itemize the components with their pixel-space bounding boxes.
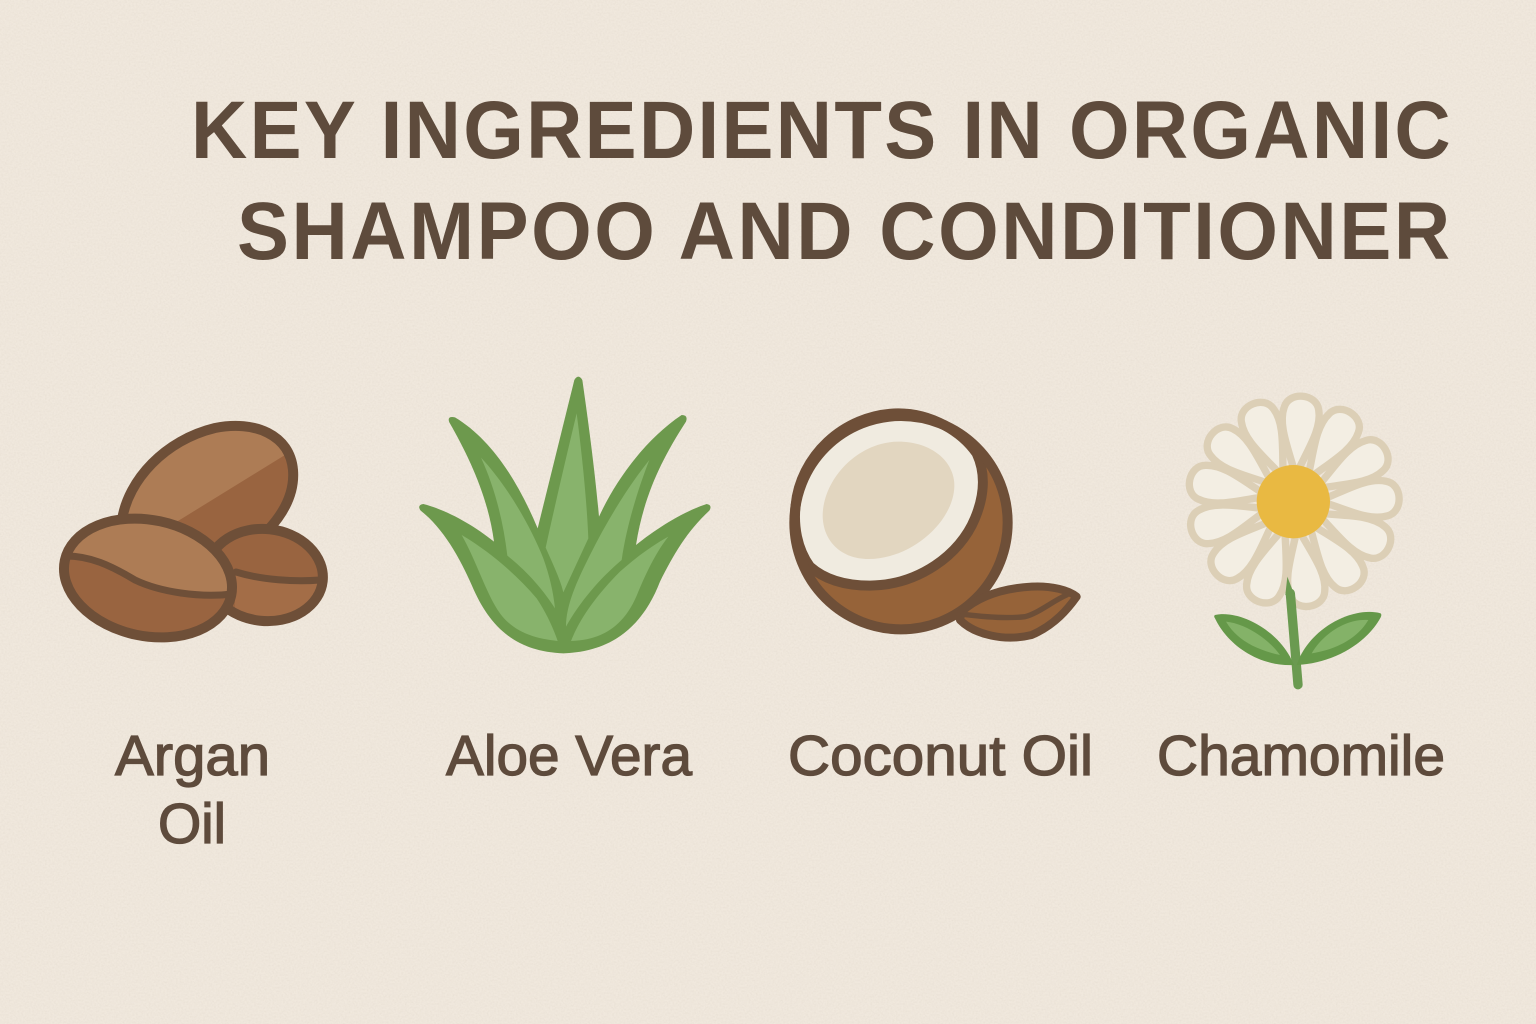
left leaf	[1214, 614, 1294, 665]
label: argan oil: Oil	[158, 792, 226, 856]
front nut	[59, 514, 237, 642]
icon: argan oil nuts	[53, 426, 327, 652]
label: chamomile: Chamomile	[1157, 724, 1445, 788]
title: KEY INGREDIENTS IN ORGANIC	[191, 84, 1451, 175]
coconut piece	[960, 587, 1077, 638]
label: coconut oil: Coconut Oil	[788, 724, 1093, 788]
icon: aloe vera	[419, 377, 711, 653]
flower centre	[1257, 465, 1330, 538]
label: aloe vera: Aloe Vera	[446, 724, 692, 788]
label: argan oil	[115, 724, 270, 856]
label: argan oil: Argan	[115, 724, 270, 788]
big back nut	[122, 426, 293, 560]
title	[191, 84, 1451, 276]
petals	[1186, 395, 1400, 609]
right nut	[214, 524, 328, 626]
stem	[1285, 577, 1298, 685]
icon: coconut	[794, 413, 1077, 638]
title: SHAMPOO AND CONDITIONER	[237, 185, 1450, 276]
icon: chamomile	[1186, 395, 1400, 685]
right leaf	[1297, 612, 1381, 665]
